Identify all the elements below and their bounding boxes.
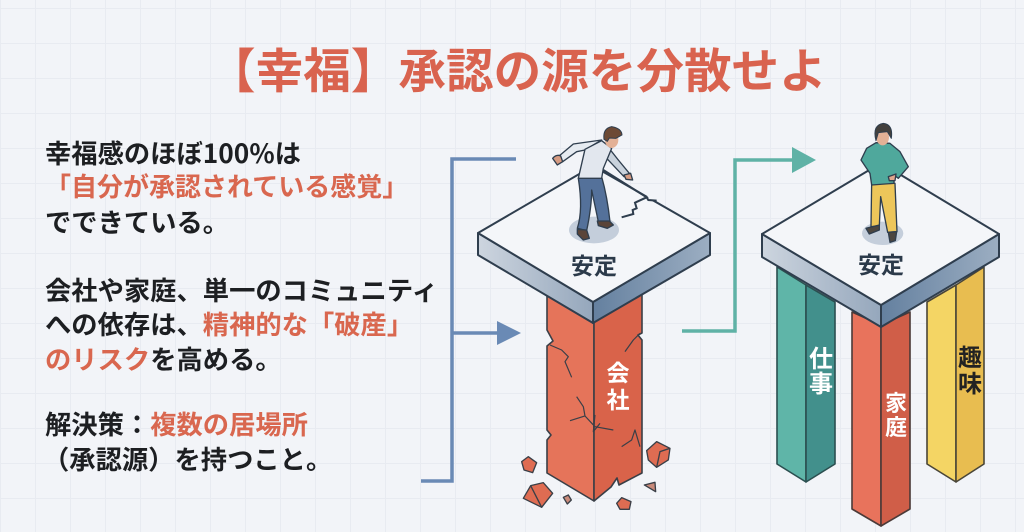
arrow: blue bracket xyxy=(421,159,521,481)
person: unsteady figure xyxy=(553,127,633,243)
text block: happiness comes from approval xyxy=(45,132,408,240)
pillar: family xyxy=(852,312,910,526)
label: stability: 安定 xyxy=(571,253,617,279)
arrow: teal xyxy=(682,147,816,331)
label: work: 事 xyxy=(809,371,833,398)
label: family: 庭 xyxy=(885,415,907,440)
label: work xyxy=(809,346,833,398)
person: confident figure xyxy=(861,123,908,245)
crack in platform xyxy=(603,170,657,217)
text block: risk of single dependence: 会社や家庭、単一のコミュニティ xyxy=(45,269,438,308)
text block: happiness comes from approval: でできている。 xyxy=(45,201,229,240)
text block: solution: 解決策：複数の居場所 xyxy=(45,403,308,442)
text block: happiness comes from approval: 幸福感のほぼ100%は xyxy=(45,132,301,171)
platform: right stability slab xyxy=(762,163,999,327)
pillar: hobby xyxy=(927,267,984,482)
text block: risk of single dependence xyxy=(45,269,438,377)
label: hobby: 味 xyxy=(958,371,982,398)
label: family: 家 xyxy=(885,391,907,416)
label: hobby: 趣 xyxy=(958,345,982,372)
label: stability: 安定 xyxy=(858,252,904,278)
label: company xyxy=(606,360,630,413)
label: company: 会 xyxy=(606,360,630,386)
text block: happiness comes from approval: 「自分が承認されている感覚」 xyxy=(45,167,408,204)
text block: solution: （承認源）を持つこと。 xyxy=(43,438,332,477)
label: hobby xyxy=(958,345,982,398)
text block: risk of single dependence: のリスクを高める。 xyxy=(45,338,282,377)
label: family xyxy=(885,391,907,440)
label: work: 仕 xyxy=(809,346,833,373)
title: 【幸福】承認の源を分散せよ xyxy=(208,46,827,99)
text block: risk of single dependence: への依存は、精神的な「破産」 xyxy=(45,303,413,342)
text block: solution xyxy=(43,403,332,477)
pillar: cracked company pillar xyxy=(547,290,642,501)
label: company: 社 xyxy=(606,387,630,413)
platform: left stability slab xyxy=(478,166,710,323)
pillar: work xyxy=(777,267,835,482)
rubble xyxy=(522,442,670,509)
